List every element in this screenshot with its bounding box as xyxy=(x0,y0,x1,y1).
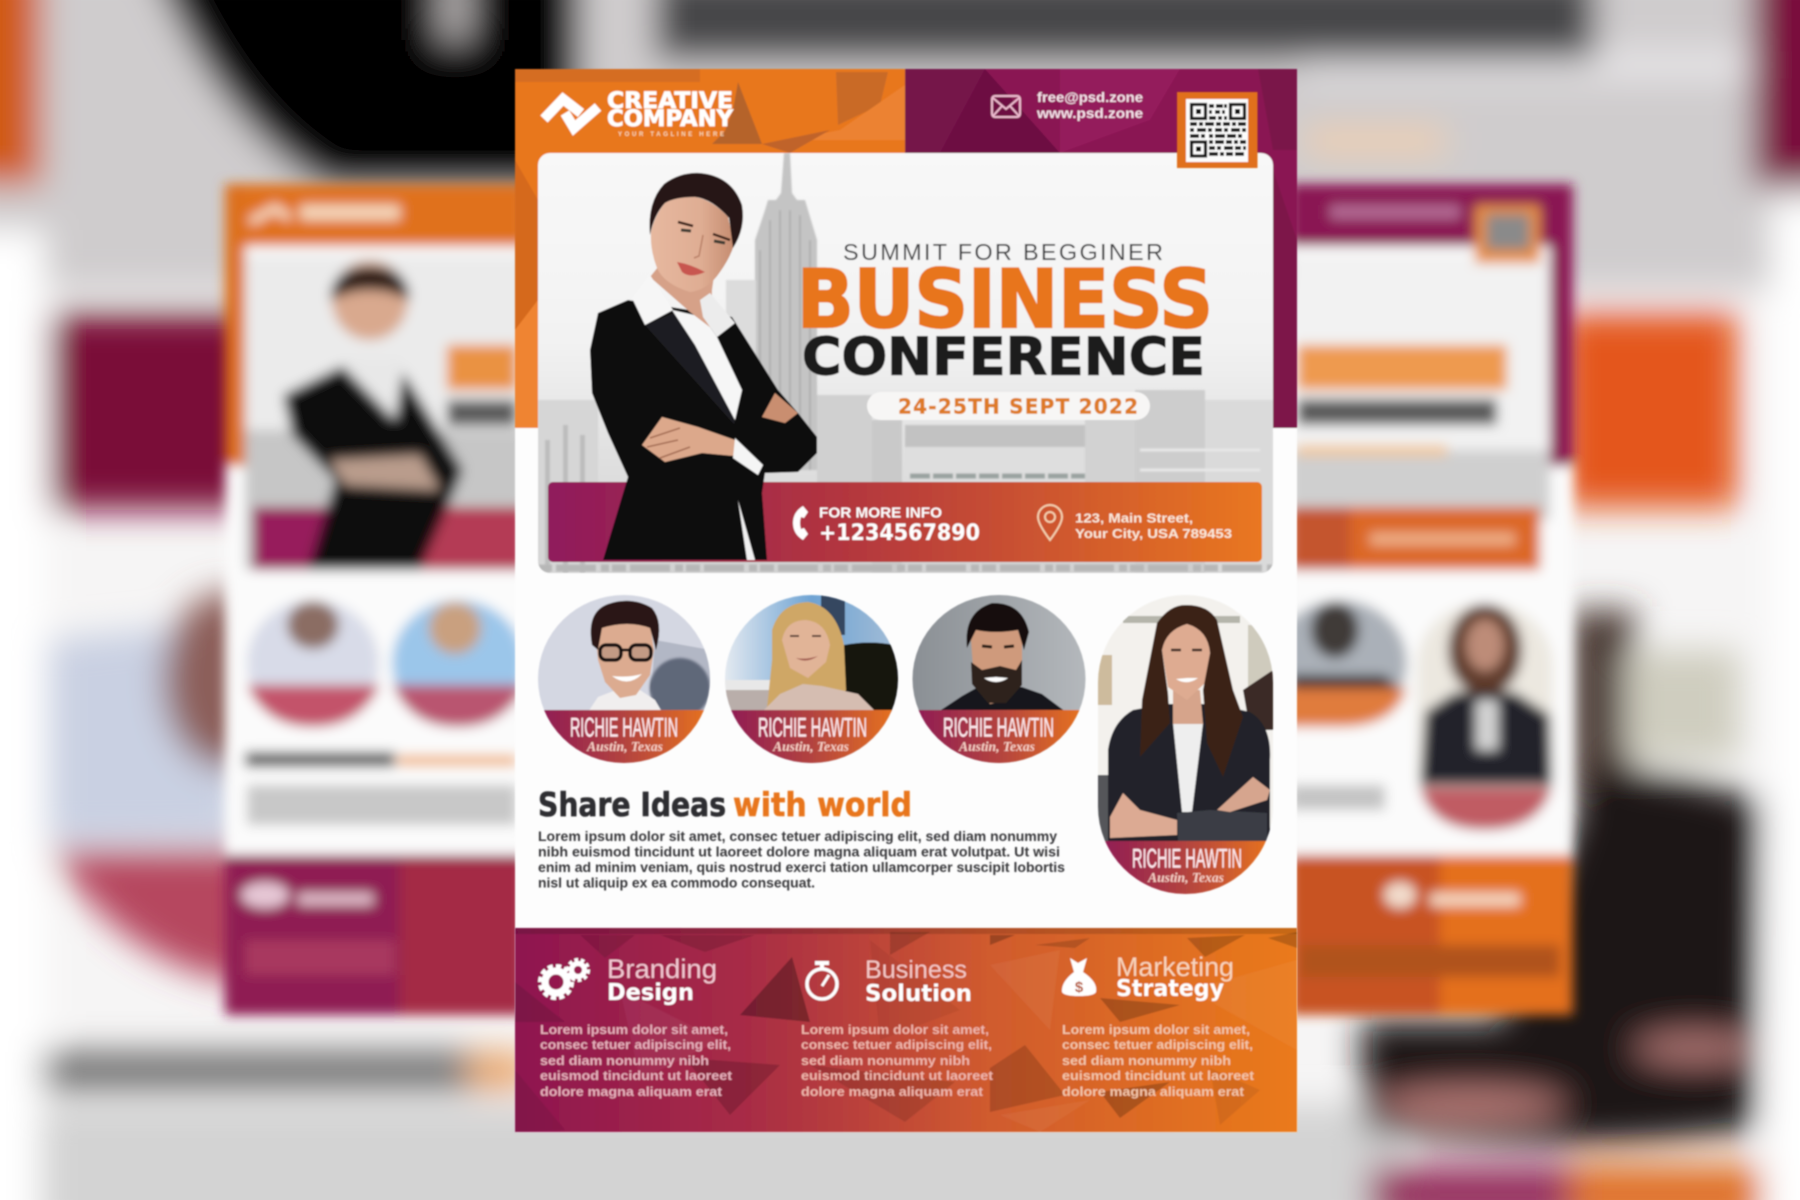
speaker 4: featured xyxy=(1098,595,1273,894)
card background xyxy=(538,153,1273,573)
panel: bottom features band xyxy=(515,928,1297,1132)
name label 1: Austin, Texas xyxy=(586,740,664,755)
feature copy: consec tetuer adipiscing elit, xyxy=(801,1037,992,1052)
QR code xyxy=(1177,92,1258,168)
email text xyxy=(1036,90,1144,121)
feature copy: consec tetuer adipiscing elit, xyxy=(1062,1037,1253,1052)
icon: gears xyxy=(540,960,588,998)
feature copy: euismod tincidunt ut laoreet xyxy=(1062,1068,1255,1083)
text block: description: Lorem ipsum dolor sit amet, consec tetuer adipiscing elit, sed diam nonummy xyxy=(538,829,1058,844)
heading: business: BUSINESS xyxy=(797,253,1213,346)
speaker 1 xyxy=(538,595,711,763)
flyer white sheet xyxy=(515,69,1297,1132)
feature title: Business xyxy=(865,956,967,984)
subtitle: SUMMIT FOR BEGGINER xyxy=(843,239,1163,265)
feature copy: sed diam nonummy nibh xyxy=(801,1053,970,1068)
feature copy xyxy=(801,1022,994,1099)
name label 4 xyxy=(1132,844,1242,886)
feature copy xyxy=(540,1022,733,1099)
heading: share ideas xyxy=(538,785,912,824)
feature title: Marketing xyxy=(1116,952,1234,982)
logo wordmark xyxy=(607,89,734,138)
address: 123, Main Street, xyxy=(1075,510,1193,526)
feature copy: consec tetuer adipiscing elit, xyxy=(540,1037,731,1052)
name label 2: Austin, Texas xyxy=(772,740,850,755)
feature: marketing strategy: Strategy xyxy=(1116,976,1224,1002)
logo wordmark: CREATIVE xyxy=(607,89,733,114)
feature copy: sed diam nonummy nibh xyxy=(540,1053,709,1068)
blurred right flyer xyxy=(1273,184,1573,1015)
feature: branding design: Design xyxy=(607,980,694,1006)
address xyxy=(1075,510,1232,541)
heading: share ideas: with world xyxy=(733,785,912,824)
name label 2 xyxy=(758,712,867,755)
name label 2: RICHIE HAWTIN xyxy=(758,712,867,742)
email text: www.psd.zone xyxy=(1036,106,1144,121)
name label 3: RICHIE HAWTIN xyxy=(943,712,1054,742)
address: Your City, USA 789453 xyxy=(1075,526,1232,541)
heading: share ideas: Share Ideas xyxy=(538,785,726,824)
logo wordmark: YOUR TAGLINE HERE xyxy=(618,132,725,138)
for more info: +1234567890 xyxy=(819,521,980,546)
speaker 2 xyxy=(725,595,899,763)
logo xyxy=(544,89,734,138)
icon: stopwatch xyxy=(807,963,837,999)
for more info xyxy=(819,504,980,546)
text block: description: nibh euismod tincidunt ut laoreet dolore magna aliquam erat volutpat. Ut wisi xyxy=(538,844,1060,860)
info bar xyxy=(548,482,1262,562)
headline block xyxy=(797,239,1213,420)
feature: business solution: Solution xyxy=(865,981,972,1007)
feature: marketing strategy xyxy=(1062,952,1255,1099)
panel: hero card xyxy=(538,153,1273,573)
feature copy: dolore magna aliquam erat xyxy=(540,1084,723,1099)
logo wordmark: COMPANY xyxy=(607,107,734,132)
icon: money bag: $ xyxy=(1075,979,1084,996)
heading: conference: CONFERENCE xyxy=(802,328,1205,388)
feature: business solution xyxy=(801,956,994,1099)
contact: email and website xyxy=(992,90,1144,121)
icon: logo zigzag xyxy=(544,99,598,128)
name label 1: RICHIE HAWTIN xyxy=(570,712,678,742)
feature copy: euismod tincidunt ut laoreet xyxy=(801,1068,994,1083)
feature: branding design xyxy=(540,954,733,1099)
icon: location pin xyxy=(1038,505,1062,540)
feature copy: euismod tincidunt ut laoreet xyxy=(540,1068,733,1083)
date pill: 24-25TH SEPT 2022 xyxy=(898,394,1138,418)
icon: phone xyxy=(793,506,808,540)
icon: money bag xyxy=(1062,958,1096,996)
text block: description: nisl ut aliquip ex ea commodo consequat. xyxy=(538,876,815,890)
speaker 3 xyxy=(912,595,1086,763)
name label 4: Austin, Texas xyxy=(1147,871,1225,886)
text block: description: enim ad minim veniam, quis nostrud exerci tation ullamcorper suscipit lobortis xyxy=(538,860,1065,875)
feature copy: Lorem ipsum dolor sit amet, xyxy=(1062,1022,1250,1037)
icon: envelope xyxy=(992,96,1020,117)
feature copy: Lorem ipsum dolor sit amet, xyxy=(801,1022,989,1037)
main speaker photo xyxy=(590,173,817,560)
blurred left flyer xyxy=(225,184,525,1015)
feature copy: Lorem ipsum dolor sit amet, xyxy=(540,1022,728,1037)
city skyline xyxy=(538,153,1273,573)
name label 3: Austin, Texas xyxy=(958,740,1036,755)
feature copy: sed diam nonummy nibh xyxy=(1062,1053,1231,1068)
email text: free@psd.zone xyxy=(1037,90,1144,105)
feature copy xyxy=(1062,1022,1255,1099)
name label 3 xyxy=(943,712,1054,755)
feature copy: dolore magna aliquam erat xyxy=(801,1084,984,1099)
name label 1 xyxy=(570,712,678,755)
feature copy: dolore magna aliquam erat xyxy=(1062,1084,1245,1099)
for more info: FOR MORE INFO xyxy=(819,504,942,522)
name label 4: RICHIE HAWTIN xyxy=(1132,844,1242,874)
flyer xyxy=(515,69,1297,1132)
panel: top header band xyxy=(515,69,1297,428)
text block: description xyxy=(538,829,1065,890)
feature title: Branding xyxy=(607,954,717,984)
